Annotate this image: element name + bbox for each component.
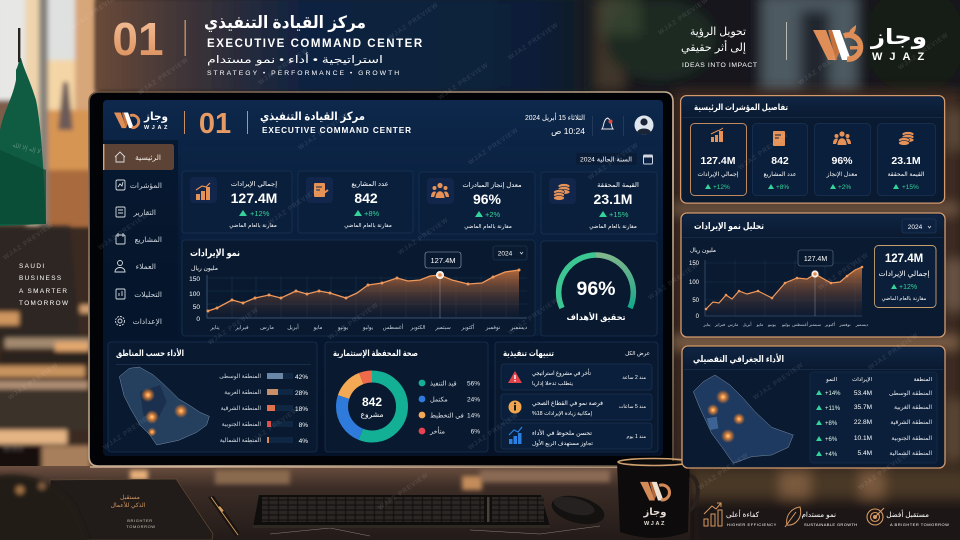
card: projects: عدد المشاريع — [764, 171, 796, 178]
regional performance panel — [108, 342, 317, 452]
month labels: مارس — [728, 322, 738, 327]
year dropdown — [902, 219, 936, 233]
header right: tagline — [681, 22, 787, 69]
screen header date and user: الثلاثاء 15 أبريل 2024 — [525, 112, 585, 122]
header right: WJAZ logo: WJAZ — [872, 51, 931, 63]
left slogan: BUSINESS — [19, 275, 63, 282]
region rows — [219, 373, 308, 445]
total revenue callout: 127.4M — [885, 253, 923, 265]
footer values — [704, 503, 949, 527]
KPI: realized value: مقارنة بالعام الماضي — [589, 224, 637, 230]
watermarks: WJAZ PREVIEW — [817, 252, 870, 292]
watermarks: WJAZ PREVIEW — [587, 142, 640, 182]
region rows: المنطقة الوسطى — [219, 374, 261, 380]
grid — [207, 276, 527, 318]
left slogan — [4, 263, 70, 453]
month labels: ديسمبر — [510, 325, 528, 331]
notebook: TOMORROW — [126, 524, 156, 529]
regional table: +8% — [825, 421, 838, 427]
goal gauge panel: تحقيق الأهداف — [566, 312, 626, 323]
total revenue callout — [874, 246, 936, 308]
notebook: الذكي للأعمال — [111, 501, 146, 509]
goal gauge panel — [541, 241, 657, 336]
watermarks: WJAZ PREVIEW — [507, 297, 560, 337]
main content panel — [181, 146, 658, 336]
alert: opportunity: منذ 5 ساعات — [619, 404, 646, 410]
card: revenue — [690, 124, 746, 196]
legend: في التخطيط — [430, 412, 464, 420]
monitor — [89, 92, 673, 466]
KPI: realized value: +15% — [609, 210, 629, 219]
alert: opportunity: إمكانية زيادة الإيرادات 18% — [532, 410, 592, 417]
nav labels — [130, 153, 162, 326]
icon: saudi flag — [0, 28, 46, 226]
alert: delay: يتطلب تدخلا إداريا — [532, 381, 573, 387]
total revenue callout: مقارنة بالعام الماضي — [882, 296, 927, 302]
month labels: يونيو — [337, 325, 349, 331]
month labels: نوفمبر — [838, 322, 851, 327]
KPI: total revenue — [182, 171, 292, 233]
region rows: 8% — [299, 422, 308, 429]
KPI: initiatives completion: +2% — [485, 210, 501, 219]
legend: قيد التنفيذ — [430, 380, 457, 388]
screen header date and user — [525, 112, 654, 136]
total revenue callout: +12% — [899, 284, 917, 291]
alert: opportunity — [501, 394, 652, 420]
card: projects: 842 — [771, 155, 789, 167]
desk — [0, 466, 690, 540]
tooltip — [798, 250, 833, 266]
y axis labels: 50 — [193, 304, 200, 311]
card: completion: 96% — [831, 155, 853, 167]
month labels: أبريل — [743, 321, 751, 327]
panel: revenue growth analysis: تحليل نمو الإيرادات — [694, 221, 764, 232]
footer values: كفاءة أعلى — [726, 509, 760, 519]
month labels: يوليو — [781, 322, 791, 327]
region rows: المنطقة الشمالية — [220, 438, 261, 444]
icon: coins — [554, 184, 570, 200]
month labels: سبتمبر — [434, 325, 451, 331]
month labels: ديسمبر — [855, 322, 869, 327]
watermarks: WJAZ PREVIEW — [267, 187, 320, 227]
regional table: 35.7M — [854, 404, 872, 411]
legend: 6% — [471, 428, 480, 436]
screen header logo — [114, 111, 170, 131]
y axis labels: 100 — [689, 280, 700, 286]
alert: improvement: تجاوز مستهدف الربع الأول — [532, 439, 593, 447]
month labels: أكتوبر — [461, 323, 475, 331]
watermarks: WJAZ PREVIEW — [207, 307, 260, 347]
card: value: 23.1M — [891, 155, 921, 167]
region rows: المنطقة الجنوبية — [222, 422, 261, 428]
screen header number: 01 — [199, 108, 231, 140]
legend — [419, 380, 480, 436]
month labels: نوفمبر — [485, 325, 501, 331]
nav labels: العملاء — [136, 262, 156, 271]
header right: WJAZ logo: وجاز — [870, 26, 927, 49]
watermarks: WJAZ PREVIEW — [7, 362, 60, 402]
icon: clipboard — [314, 183, 328, 197]
left slogan: SAUDI — [19, 263, 46, 270]
area line chart — [206, 268, 520, 318]
regional table: النمو — [825, 377, 837, 383]
regional table: المنطقة الوسطى — [889, 390, 932, 397]
tooltip: 127.4M — [804, 256, 827, 263]
year dropdown: 2024 — [908, 224, 923, 231]
monitor stand — [311, 464, 467, 494]
watermarks: WJAZ PREVIEW — [137, 57, 190, 97]
footer values: SUSTAINABLE GROWTH — [804, 522, 857, 527]
tooltip: 127.4M — [430, 256, 456, 265]
alert: delay: منذ 2 ساعة — [622, 375, 646, 381]
left slogan: TOMORROW — [19, 300, 70, 307]
region rows: المنطقة الشرقية — [221, 406, 261, 412]
nav labels: الرئيسية — [135, 153, 161, 162]
month labels: مارس — [260, 325, 274, 331]
header right: tagline: تحويل الرؤية — [690, 26, 746, 38]
header left: title block: STRATEGY • PERFORMANCE • GROWTH — [207, 70, 401, 77]
month labels: أغسطس — [792, 321, 808, 327]
year selector: السنة الحالية 2024 — [580, 156, 632, 164]
regional table: +6% — [825, 437, 838, 443]
card: projects: +8% — [776, 184, 789, 191]
regional performance panel: الأداء حسب المناطق — [116, 348, 184, 359]
icon: leaf — [785, 507, 801, 527]
legend: متأخر — [429, 426, 445, 436]
y axis labels — [189, 276, 200, 323]
screen header logo: WJAZ — [144, 125, 170, 131]
header left: title block: استراتيجية • أداء • نمو مستدام — [207, 52, 383, 66]
watermarks: WJAZ PREVIEW — [387, 2, 440, 42]
y axis labels: 50 — [692, 298, 700, 304]
month labels: سبتمبر — [808, 322, 822, 327]
saudi map — [119, 367, 209, 445]
portfolio health panel: صحة المحفظة الإستثمارية — [333, 348, 418, 359]
left slogan: BIRS — [4, 446, 25, 453]
header right: tagline: IDEAS INTO IMPACT — [682, 62, 758, 69]
region rows: 28% — [295, 390, 308, 397]
footer values: نمو مستدام — [801, 510, 836, 519]
card: revenue: +12% — [713, 184, 730, 191]
pen — [208, 496, 240, 537]
icon: bars — [196, 183, 210, 200]
watermarks: WJAZ PREVIEW — [507, 22, 560, 62]
regional table — [810, 372, 937, 463]
icon: saudi flag: لا إله إلا الله — [11, 142, 41, 155]
month labels: أبريل — [287, 323, 299, 331]
regional table: المنطقة — [914, 377, 932, 383]
month labels: يوليو — [362, 325, 374, 331]
executive alerts panel: تنبيهات تنفيذية — [503, 348, 554, 359]
nav labels: التقارير — [132, 208, 156, 217]
y axis labels: 150 — [689, 261, 700, 267]
mug: وجاز — [643, 507, 666, 518]
portfolio health panel: مشروع — [361, 410, 383, 419]
KPI: initiatives completion — [419, 172, 535, 234]
sidebar — [103, 144, 174, 326]
legend: 56% — [467, 380, 480, 388]
month labels: يناير — [209, 325, 220, 331]
alert: delay: تأخر في مشروع استراتيجي — [532, 368, 591, 377]
nav labels: الإعدادات — [133, 317, 162, 326]
KPI: project count: مقارنة بالعام الماضي — [344, 223, 392, 229]
watermarks: WJAZ PREVIEW — [102, 412, 155, 452]
executive alerts panel — [495, 342, 658, 452]
footer values: HIGHER EFFICIENCY — [727, 522, 777, 527]
watermarks: WJAZ PREVIEW — [467, 412, 520, 452]
watermarks: WJAZ PREVIEW — [97, 212, 150, 252]
y axis labels: 0 — [196, 316, 200, 323]
KPI: project count — [298, 171, 413, 233]
KPI: initiatives completion: 96% — [473, 191, 502, 207]
nav labels: المؤشرات — [130, 181, 162, 190]
month labels: أكتوبر — [824, 321, 835, 327]
icon: people — [431, 183, 449, 198]
watermarks: WJAZ PREVIEW — [797, 47, 850, 87]
region rows: المنطقة الغربية — [224, 390, 261, 396]
alert: opportunity: فرصة نمو في القطاع الصحي — [532, 400, 603, 407]
card: value: القيمة المحققة — [888, 171, 925, 178]
regional table: 5.4M — [858, 450, 872, 457]
revenue chart panel: مليون ريال — [191, 265, 218, 272]
alert: improvement: منذ 1 يوم — [627, 434, 646, 440]
revenue chart panel: نمو الإيرادات — [190, 248, 240, 259]
panel: KPI details — [681, 96, 945, 203]
notebook: مستقبل — [120, 494, 140, 501]
card: revenue: إجمالي الإيرادات — [698, 171, 739, 178]
card: completion: +2% — [838, 184, 851, 191]
y axis labels: 0 — [696, 314, 700, 320]
portfolio health panel — [325, 342, 488, 452]
regional table: 22.8M — [854, 419, 872, 426]
watermarks: WJAZ PREVIEW — [737, 132, 790, 172]
year dropdown: 2024 — [498, 250, 513, 258]
y axis labels: 100 — [189, 291, 200, 298]
header left: title block — [184, 13, 424, 77]
card: projects — [752, 124, 808, 196]
watermarks: WJAZ PREVIEW — [697, 452, 750, 492]
KPI: initiatives completion: معدل إنجاز المبادرات — [462, 182, 522, 189]
screen header title: مركز القيادة التنفيذي — [260, 111, 365, 123]
tooltip — [425, 252, 461, 268]
watermarks: WJAZ PREVIEW — [867, 332, 920, 372]
panel: detailed geographic performance: الأداء الجغرافي التفصيلي — [693, 353, 784, 365]
KPI: project count: +8% — [364, 209, 380, 218]
KPI: realized value: القيمة المحققة — [597, 182, 639, 189]
mouse — [549, 491, 607, 529]
KPI: realized value — [541, 172, 657, 234]
revenue chart panel — [182, 240, 535, 336]
regional table: +11% — [825, 406, 841, 412]
month labels: فبراير — [234, 325, 249, 331]
regional table: المنطقة الجنوبية — [891, 435, 932, 442]
regional table: 53.4M — [854, 390, 872, 397]
area line chart — [705, 266, 863, 316]
month labels: مايو — [313, 325, 323, 331]
icon: efficiency — [704, 503, 722, 526]
watermarks: WJAZ PREVIEW — [897, 32, 950, 72]
alert: delay — [501, 364, 652, 390]
footer values: مستقبل أفضل — [886, 509, 929, 519]
screen header date and user: 10:24 ص — [551, 126, 585, 136]
y axis labels: 150 — [189, 276, 200, 283]
y axis labels — [689, 261, 700, 320]
regional table: 10.1M — [854, 435, 872, 442]
month labels: يونيو — [767, 322, 777, 327]
KPI: initiatives completion: مقارنة بالعام الماضي — [464, 224, 512, 230]
notebook: BRIGHTER — [127, 518, 153, 523]
screen header title — [260, 111, 412, 135]
regional table: +14% — [825, 391, 841, 397]
KPI: project count: عدد المشاريع — [351, 181, 389, 188]
year selector — [576, 153, 652, 165]
nav labels: المشاريع — [135, 235, 162, 244]
KPI: realized value: 23.1M — [594, 191, 632, 207]
regional table: المنطقة الغربية — [894, 404, 932, 411]
month labels — [209, 323, 528, 331]
regional table: الإيرادات — [852, 377, 872, 383]
legend: 24% — [467, 396, 480, 404]
keyboard — [253, 495, 550, 528]
saudi map — [693, 375, 793, 463]
month labels: أغسطس — [383, 323, 404, 331]
month labels: الكتوبر — [409, 324, 426, 331]
panel: KPI details: تفاصيل المؤشرات الرئيسية — [694, 102, 788, 113]
region rows: 18% — [295, 406, 308, 413]
watermarks: WJAZ PREVIEW — [397, 217, 450, 257]
card: value — [878, 124, 936, 196]
donut chart — [342, 376, 402, 436]
left slogan: A SMARTER — [19, 288, 68, 295]
executive alerts panel: عرض الكل — [625, 350, 650, 357]
mug: WJAZ — [644, 521, 666, 527]
alert: improvement — [501, 423, 652, 449]
foreground chair — [0, 475, 90, 540]
month labels: فبراير — [714, 322, 725, 327]
alert: improvement: تحسن ملحوظ في الأداء — [532, 429, 592, 437]
regional table: المنطقة الشرقية — [890, 419, 932, 426]
watermarks: WJAZ PREVIEW — [467, 127, 520, 167]
watermarks: WJAZ PREVIEW — [437, 62, 490, 102]
header right: tagline: إلى أثر حقيقي — [681, 40, 746, 54]
nav icons — [115, 152, 125, 326]
KPI: total revenue: مقارنة بالعام الماضي — [229, 223, 277, 229]
panel: detailed geographic performance — [682, 346, 945, 468]
watermarks: WJAZ PREVIEW — [257, 47, 310, 87]
month labels: مايو — [756, 322, 763, 327]
portfolio health panel: 842 — [362, 395, 382, 409]
watermarks: WJAZ PREVIEW — [247, 407, 300, 447]
month labels — [702, 321, 869, 327]
nav labels: التحليلات — [134, 290, 162, 299]
footer values: A BRIGHTER TOMORROW — [890, 522, 949, 527]
legend: 14% — [467, 412, 480, 420]
header left: number 01: 01 — [112, 13, 164, 65]
regional table: +4% — [825, 452, 838, 458]
watermarks: WJAZ PREVIEW — [377, 472, 430, 512]
year dropdown — [493, 246, 527, 260]
screen header logo: وجاز — [143, 111, 168, 123]
gauge arc — [559, 255, 633, 308]
regional table: المنطقة الشمالية — [889, 450, 932, 457]
watermarks: WJAZ PREVIEW — [2, 222, 55, 262]
card: revenue: 127.4M — [700, 155, 736, 167]
header left: title block: EXECUTIVE COMMAND CENTER — [207, 38, 424, 50]
watermarks: WJAZ PREVIEW — [647, 262, 700, 302]
notebook — [50, 479, 213, 540]
watermarks: WJAZ PREVIEW — [297, 112, 350, 152]
month labels: يناير — [702, 322, 711, 327]
header left: title block: مركز القيادة التنفيذي — [204, 13, 366, 33]
KPI: total revenue: 127.4M — [231, 190, 277, 206]
watermarks: WJAZ PREVIEW — [327, 302, 380, 342]
KPI: total revenue: +12% — [250, 209, 270, 218]
card: value: +15% — [902, 184, 919, 191]
icon: target — [867, 508, 884, 525]
legend: مكتمل — [430, 396, 448, 404]
panel: revenue growth analysis — [681, 213, 945, 337]
watermarks: WJAZ PREVIEW — [857, 452, 910, 492]
panel: revenue growth analysis: مليون ريال — [690, 248, 716, 254]
screen header title: EXECUTIVE COMMAND CENTER — [262, 126, 412, 135]
screen header number — [184, 108, 248, 140]
KPI: total revenue: إجمالي الإيرادات — [231, 181, 277, 188]
goal gauge panel: 96% — [576, 278, 616, 300]
card: completion: معدل الإنجاز — [826, 171, 857, 178]
total revenue callout: إجمالي الإيرادات — [878, 269, 930, 278]
region rows: 4% — [299, 438, 308, 445]
KPI: project count: 842 — [354, 190, 378, 206]
watermarks: WJAZ PREVIEW — [752, 362, 805, 402]
mug — [617, 458, 698, 538]
region rows: 42% — [295, 374, 308, 381]
card: completion — [814, 124, 870, 196]
header right: WJAZ logo — [813, 25, 931, 63]
